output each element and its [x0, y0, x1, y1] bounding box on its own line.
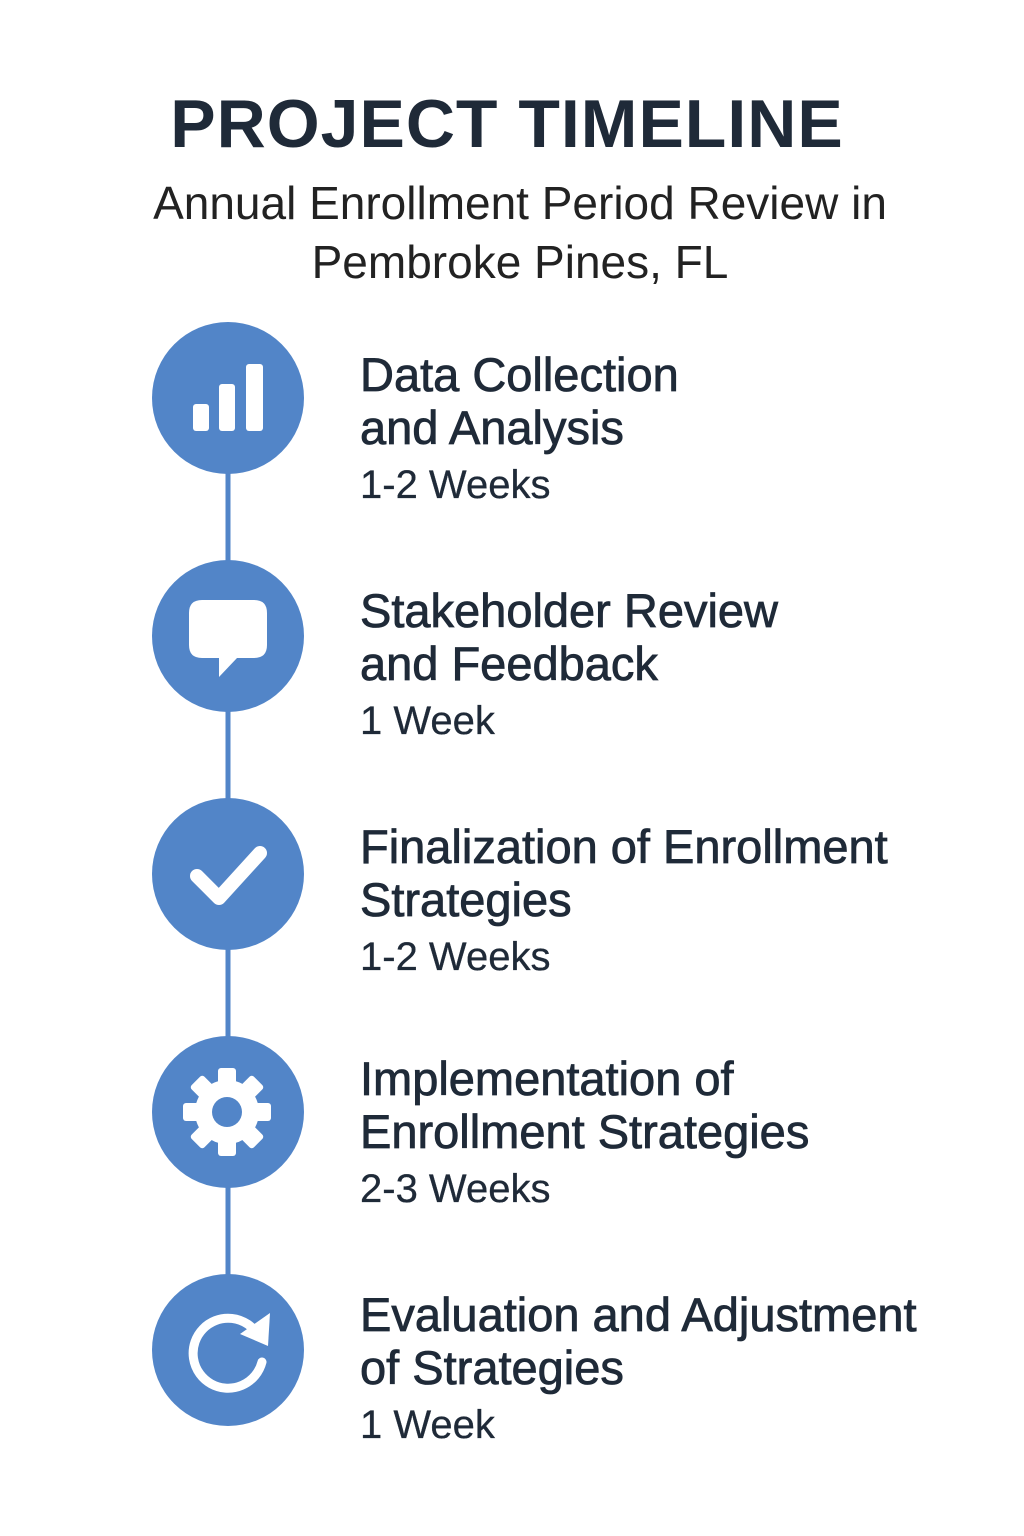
- step 2: and Feedback: [360, 637, 658, 690]
- step 3: Finalization of Enrollment: [360, 820, 888, 873]
- icon: gear: [152, 1036, 304, 1188]
- subtitle: [153, 177, 887, 288]
- icon: speech bubble: [152, 560, 304, 712]
- step 5: 1 Week: [360, 1403, 495, 1447]
- step 3: Strategies: [360, 873, 572, 926]
- step 3: [360, 820, 888, 979]
- icon: checkmark: [152, 798, 304, 950]
- step 4: [360, 1052, 809, 1211]
- step 1: and Analysis: [360, 401, 624, 454]
- icon: refresh: [152, 1274, 304, 1426]
- subtitle: Annual Enrollment Period Review in: [153, 177, 887, 229]
- title: PROJECT TIMELINE: [170, 86, 844, 162]
- step 2: Stakeholder Review: [360, 584, 778, 637]
- icon: bar chart: [152, 322, 304, 474]
- step 5: of Strategies: [360, 1341, 624, 1394]
- step 2: [360, 584, 779, 743]
- step 4: 2-3 Weeks: [360, 1167, 550, 1211]
- step 1: 1-2 Weeks: [360, 463, 550, 507]
- step 4: Implementation of: [360, 1052, 734, 1105]
- step 3: 1-2 Weeks: [360, 935, 550, 979]
- step 4: Enrollment Strategies: [360, 1105, 809, 1158]
- step 1: Data Collection: [360, 348, 679, 401]
- step 5: [360, 1288, 917, 1447]
- step 5: Evaluation and Adjustment: [360, 1288, 917, 1341]
- subtitle: Pembroke Pines, FL: [312, 236, 728, 288]
- step 1: [360, 348, 679, 507]
- step 2: 1 Week: [360, 699, 495, 743]
